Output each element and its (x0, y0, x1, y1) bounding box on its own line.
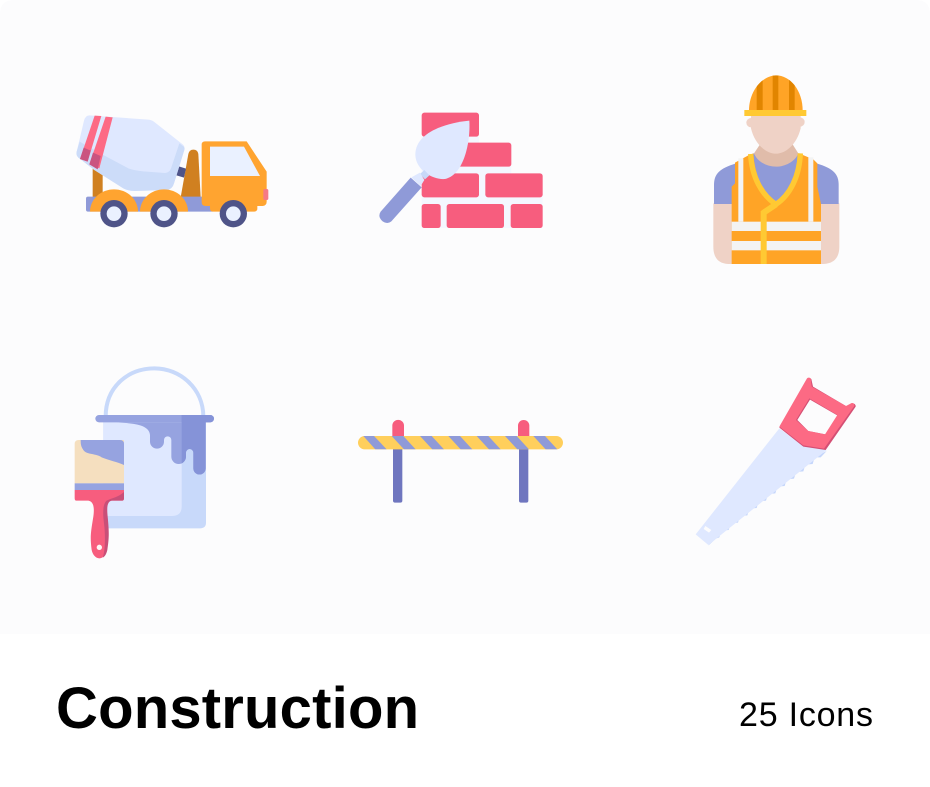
icon: paint bucket and brush (75, 368, 214, 558)
title: Construction (56, 676, 419, 741)
icon: concrete mixer truck (76, 115, 268, 227)
icon: striped road barrier (358, 420, 563, 503)
icon: brick wall and trowel (379, 113, 543, 228)
icon count: 25 Icons (739, 696, 873, 734)
icon: construction worker (713, 73, 839, 264)
icon: hand saw (696, 378, 856, 546)
